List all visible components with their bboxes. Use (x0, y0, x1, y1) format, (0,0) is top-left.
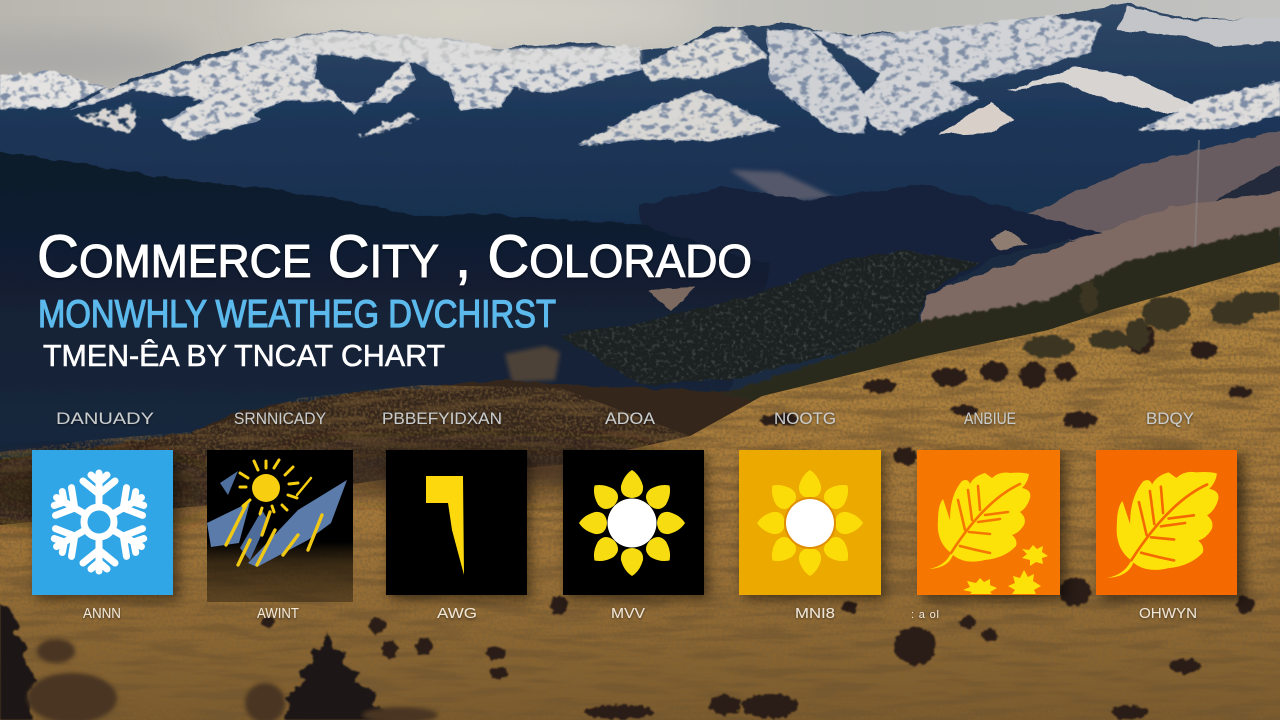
hillside shrub clusters (1022, 281, 1280, 358)
month labels bottom row: MVV (611, 605, 645, 622)
month labels top row: SRNNICADY (234, 409, 326, 428)
far mountain range (0, 4, 1280, 240)
icon: sun with petals (757, 470, 863, 576)
icon: storm clouds and rain (207, 471, 347, 567)
card: sun and storm (207, 450, 353, 602)
snow underlayer (0, 17, 1280, 145)
card: sun on amber (739, 450, 885, 600)
month labels top row (56, 409, 1194, 428)
month labels top row: ANBIUE (964, 409, 1016, 428)
icon: sun (240, 460, 311, 514)
month labels top row: DANUADY (56, 409, 154, 428)
month labels top row: ADOA (605, 409, 656, 428)
dry bushes (27, 639, 438, 720)
icon: bolt (426, 476, 464, 575)
month labels top row: PBBEFYIDXAN (382, 409, 502, 428)
month labels bottom row: ANNN (83, 605, 121, 622)
icon: sun with petals (579, 470, 685, 576)
icon: leaf (1107, 472, 1218, 578)
month labels top row: BDQY (1146, 409, 1194, 428)
icon: leaf (929, 473, 1030, 569)
golden foreground slope (0, 225, 1280, 720)
month labels top row: NOOTG (774, 409, 836, 428)
month labels bottom row: MNI8 (795, 605, 835, 622)
card: autumn leaf (1096, 450, 1245, 600)
icon: snowflake (49, 473, 149, 571)
month labels bottom row (83, 605, 1197, 622)
title: COMMERCE CITY , COLORADO (37, 223, 752, 290)
icon: small splats (963, 545, 1048, 594)
right foothills (920, 128, 1280, 325)
card: autumn leaf with splats (917, 450, 1066, 600)
subtitle: MONWHLY WEATHEG DVCHIRST (38, 293, 556, 336)
sky with clouds (0, 0, 1280, 110)
card: sun on black (563, 450, 708, 600)
card: lightning bolt (386, 450, 531, 600)
month labels bottom row: OHWYN (1139, 605, 1197, 622)
dark forested hills (0, 152, 1102, 386)
month labels bottom row: : a ol (911, 609, 939, 621)
month labels bottom row: AWINT (257, 605, 299, 622)
card: January snowflake (32, 450, 179, 600)
month labels bottom row: AWG (437, 605, 477, 622)
tagline: TMEN-ÊA BY TNCAT CHART (43, 338, 445, 373)
shrubs and trees (0, 322, 1254, 720)
